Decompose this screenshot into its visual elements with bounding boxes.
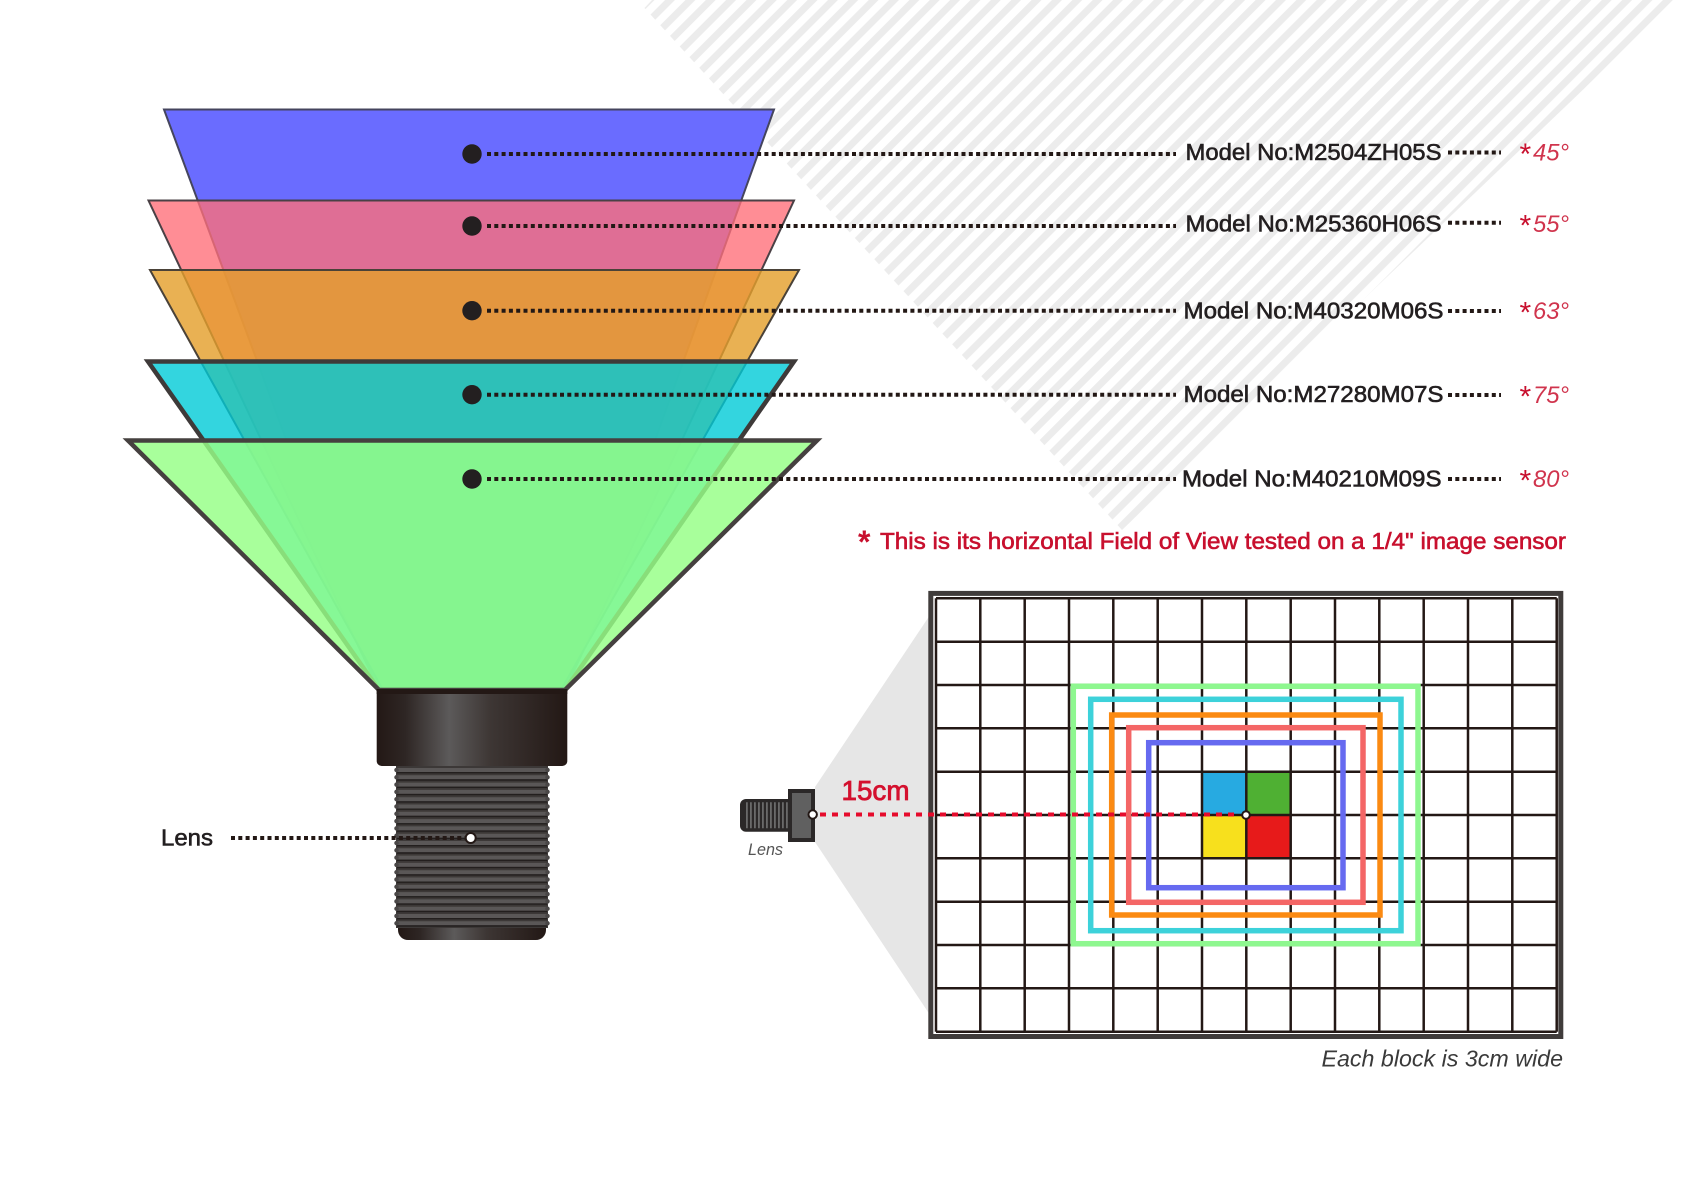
- caption: block size: Each block is 3cm wide: [1322, 1046, 1563, 1072]
- test chart: [931, 593, 1561, 1036]
- distance line: [820, 812, 1240, 816]
- frame: 45 degree blue: [1149, 743, 1343, 888]
- background: striped triangle: [644, 0, 1677, 530]
- chart background: [931, 593, 1561, 1036]
- label: Lens: Lens: [161, 824, 213, 850]
- short dotted line: [1448, 393, 1501, 397]
- lens thread: [396, 766, 548, 928]
- lens collar: [377, 690, 567, 766]
- funnel: field of view cones: [128, 110, 817, 690]
- model name: Model No:M25360H06S: [1186, 210, 1442, 236]
- label: small lens: Lens: [748, 840, 783, 859]
- lens leader line: [231, 836, 466, 840]
- frame: 80 degree green: [1073, 686, 1418, 944]
- center colour squares: [1202, 772, 1290, 858]
- cone: 80 degree green: [128, 440, 817, 690]
- angle star: *: [1520, 210, 1532, 242]
- model row 4: [1184, 380, 1569, 414]
- model row 1: [1186, 138, 1569, 171]
- angle star: *: [1520, 138, 1532, 171]
- angle: 45°: [1533, 140, 1569, 166]
- angle star: *: [1520, 296, 1532, 330]
- leader 63: [462, 301, 1176, 320]
- lens marker: [466, 833, 476, 843]
- model name: Model No:M2504ZH05S: [1186, 139, 1442, 165]
- model name: Model No:M27280M07S: [1184, 381, 1444, 407]
- illustration: large lens: [377, 689, 567, 940]
- leader 45: [462, 144, 1176, 164]
- footnote text: This is its horizontal Field of View tested on a 1/4" image sensor: [880, 528, 1566, 554]
- leader 55: [462, 216, 1176, 236]
- frame: 63 degree orange: [1112, 715, 1380, 915]
- grid: [936, 598, 1557, 1032]
- diagram: camera view wedge: [815, 615, 930, 1015]
- angle: 63°: [1533, 298, 1569, 325]
- footnote: [858, 524, 1566, 560]
- cone: 45 degree blue: [164, 110, 774, 690]
- model row 5: [1182, 464, 1569, 498]
- footnote star: *: [858, 524, 871, 560]
- lens label and leader: [161, 824, 476, 850]
- small lens body: [740, 799, 788, 832]
- frame: 55 degree red: [1129, 728, 1363, 902]
- angle: 80°: [1533, 466, 1569, 493]
- model row 3: [1184, 296, 1569, 330]
- short dotted line: [1448, 221, 1501, 225]
- lens base: [398, 928, 546, 940]
- cone: 55 degree pink: [148, 200, 794, 690]
- cone: 75 degree teal: [148, 362, 794, 690]
- angle: 75°: [1533, 382, 1569, 409]
- cone: 63 degree orange: [150, 270, 799, 690]
- small lens marker: [808, 810, 817, 819]
- small lens head: [790, 791, 813, 840]
- leader 80: [462, 469, 1176, 489]
- short dotted line: [1448, 309, 1501, 313]
- short dotted line: [1448, 150, 1501, 154]
- model row 2: [1186, 210, 1569, 242]
- angle star: *: [1520, 380, 1532, 414]
- leader 75: [462, 385, 1176, 404]
- angle star: *: [1520, 464, 1532, 498]
- leader lines and dots: [462, 144, 1176, 489]
- short dotted line: [1448, 477, 1501, 481]
- model name: Model No:M40320M06S: [1184, 298, 1444, 324]
- icon: small lens: [740, 791, 817, 840]
- model name: Model No:M40210M09S: [1182, 466, 1442, 492]
- label: distance 15cm: 15cm: [842, 775, 910, 806]
- frame: 75 degree teal: [1091, 699, 1401, 931]
- chart center marker: [1242, 811, 1250, 819]
- angle: 55°: [1533, 211, 1569, 238]
- lens collar top edge: [377, 689, 567, 694]
